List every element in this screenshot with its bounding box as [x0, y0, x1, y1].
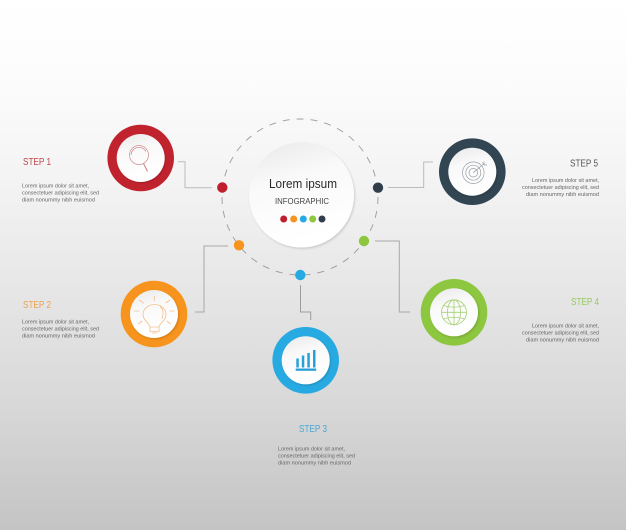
badge: step 2 bulb: [121, 281, 187, 347]
connector: step 3: [300, 285, 311, 320]
step 1 heading: STEP 1: [23, 156, 51, 168]
icon: magnifier: [130, 146, 148, 172]
step 4 heading: STEP 4: [571, 296, 599, 308]
step 4 text: Lorem ipsum dolor sit amet,: [532, 324, 599, 330]
icon: bar chart: [296, 350, 316, 371]
step 5 text: [522, 178, 599, 198]
connector: step 4: [375, 241, 410, 312]
badge: step 1 magnifier: [107, 125, 174, 191]
step 3 text: Lorem ipsum dolor sit amet,: [278, 446, 345, 452]
step 1 text: [22, 184, 99, 204]
badge: step 4 globe: [421, 279, 487, 346]
connector: step 2: [195, 246, 228, 312]
ring dot: step 1: [217, 182, 228, 193]
badge: step 5 target: [439, 138, 506, 205]
step 3 heading: STEP 3: [299, 423, 327, 435]
step 5 heading: STEP 5: [570, 158, 598, 170]
dashed ring: [222, 119, 378, 275]
connector: step 1: [178, 162, 212, 188]
step 5 text: Lorem ipsum dolor sit amet,: [532, 178, 599, 184]
step 5 text: diam nonummy nibh euismod: [526, 192, 599, 198]
icon: globe: [442, 300, 466, 325]
center colour dots: [280, 216, 326, 222]
step 1 text: diam nonummy nibh euismod: [22, 198, 95, 204]
center disc: [249, 142, 354, 248]
step 4 text: [522, 324, 599, 344]
step 2 text: [22, 320, 99, 340]
center subtitle: INFOGRAPHIC: [275, 197, 329, 206]
ring dot: step 2: [234, 240, 244, 250]
step 2 text: diam nonummy nibh euismod: [22, 334, 95, 340]
badge: step 3 chart: [272, 327, 339, 394]
step 2 text: Lorem ipsum dolor sit amet,: [22, 320, 89, 326]
step 1 text: consectetuer adipiscing elit, sed: [22, 190, 99, 196]
icon: light bulb: [134, 296, 174, 333]
step 3 text: [278, 446, 355, 466]
step 3 text: consectetuer adipiscing elit, sed: [278, 454, 355, 460]
step 2 text: consectetuer adipiscing elit, sed: [22, 326, 99, 332]
ring dot: step 3: [295, 270, 305, 280]
icon: target: [462, 162, 487, 184]
step 5 text: consectetuer adipiscing elit, sed: [522, 185, 599, 191]
step 2 heading: STEP 2: [23, 299, 51, 311]
ring dot: step 5: [373, 182, 383, 193]
center title: Lorem ipsum: [269, 177, 337, 191]
ring dot: step 4: [359, 236, 369, 246]
step 4 text: consectetuer adipiscing elit, sed: [522, 330, 599, 336]
step 4 text: diam nonummy nibh euismod: [526, 338, 599, 344]
step 3 text: diam nonummy nibh euismod: [278, 460, 351, 466]
step 1 text: Lorem ipsum dolor sit amet,: [22, 184, 89, 190]
connector: step 5: [388, 162, 433, 188]
